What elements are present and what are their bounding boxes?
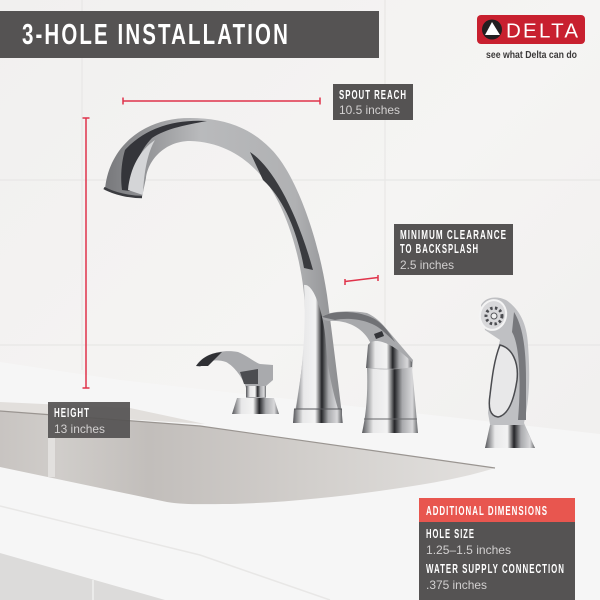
counter front and cabinet: [0, 506, 330, 600]
faucet: main spout: [104, 118, 343, 423]
panel: additional dimensions: [419, 498, 575, 600]
hole size: HOLE SIZE: [426, 527, 475, 541]
sink basin: [0, 402, 495, 504]
hole size: 1.25–1.5 inches: [426, 543, 511, 557]
label: spout reach: [333, 84, 413, 120]
water supply connection: .375 inches: [426, 578, 487, 592]
side sprayer: [477, 297, 535, 448]
panel header: [419, 498, 575, 522]
countertop: [0, 362, 600, 600]
label: minimum clearance: [394, 224, 513, 275]
arrow: spout reach dimension line: [123, 98, 320, 104]
label: minimum clearance: 2.5 inches: [400, 258, 454, 272]
label: minimum clearance: TO BACKSPLASH: [400, 242, 479, 256]
Delta logo: DELTA: [506, 20, 578, 42]
title bar: 3-HOLE INSTALLATION: [22, 19, 290, 51]
label: height: 13 inches: [54, 422, 105, 436]
water supply connection: [426, 562, 565, 592]
label: spout reach: 10.5 inches: [339, 103, 400, 117]
title bar: [0, 11, 379, 58]
Delta logo: see what Delta can do: [486, 50, 577, 61]
arrow: clearance dimension line: [345, 275, 378, 285]
Delta logo: [477, 15, 585, 61]
faucet handle: [322, 311, 418, 433]
hole size: [426, 527, 511, 557]
arrow: height dimension line: [82, 118, 90, 388]
soap dispenser: [196, 351, 279, 414]
label: spout reach: SPOUT REACH: [339, 88, 407, 102]
label: height: [48, 402, 130, 438]
label: minimum clearance: MINIMUM CLEARANCE: [400, 228, 507, 242]
label: height: HEIGHT: [54, 406, 90, 420]
